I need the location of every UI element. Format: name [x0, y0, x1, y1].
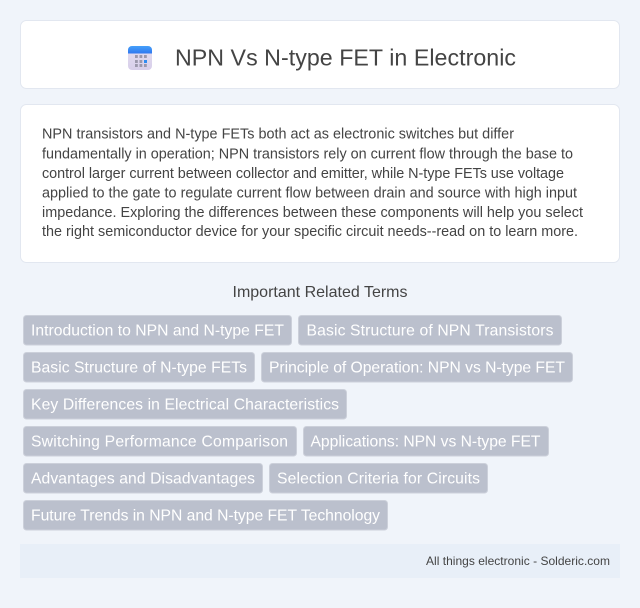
tag: [24, 500, 388, 530]
tag: Applications: NPN vs N-type FET: [310, 433, 541, 450]
title: NPN Vs N-type FET in Electronic: [175, 45, 516, 71]
tag: [270, 464, 488, 493]
tag: Advantages and Disadvantages: [31, 470, 255, 487]
tag: Key Differences in Electrical Characteristics: [31, 396, 339, 413]
tag: [262, 352, 572, 382]
text block: description: applied to the gate to regulate current flow between drain and source with high input: [42, 186, 577, 202]
tag list: [24, 316, 572, 530]
tag: Switching Performance Comparison: [31, 433, 288, 450]
footer: [20, 544, 620, 578]
text block: description: control larger current between collector and emitter, while N-type FETs use voltage: [42, 166, 564, 182]
tag: Selection Criteria for Circuits: [277, 470, 480, 487]
tag: [304, 426, 548, 456]
tag: [24, 426, 296, 456]
text block: description: the right semiconductor device for your specific circuit needs--read on to learn more.: [42, 224, 578, 240]
tag: Principle of Operation: NPN vs N-type FET: [269, 359, 565, 376]
heading: related terms: Important Related Terms: [232, 284, 408, 301]
text block: description: NPN transistors and N-type FETs both act as electronic switches but differ: [42, 127, 514, 143]
text block: description: [42, 127, 583, 240]
tag: Future Trends in NPN and N-type FET Technology: [31, 507, 380, 524]
tag: [24, 390, 346, 419]
text block: description: impedance. Exploring the differences between these components will help you select: [42, 205, 583, 221]
panel: description: [20, 104, 620, 262]
tag: Basic Structure of N-type FETs: [31, 359, 247, 376]
tag: [24, 352, 254, 382]
tag: Introduction to NPN and N-type FET: [31, 322, 284, 339]
tag: [24, 464, 262, 493]
footer credit: All things electronic - Solderic.com: [426, 554, 610, 568]
panel: header: [20, 20, 620, 88]
tag: Basic Structure of NPN Transistors: [306, 322, 554, 339]
text block: description: fundamentally in operation; NPN transistors rely on current flow through the base to: [42, 146, 573, 162]
icon: calendar grid: [128, 46, 152, 70]
tag: [298, 316, 562, 345]
tag: [24, 316, 292, 345]
